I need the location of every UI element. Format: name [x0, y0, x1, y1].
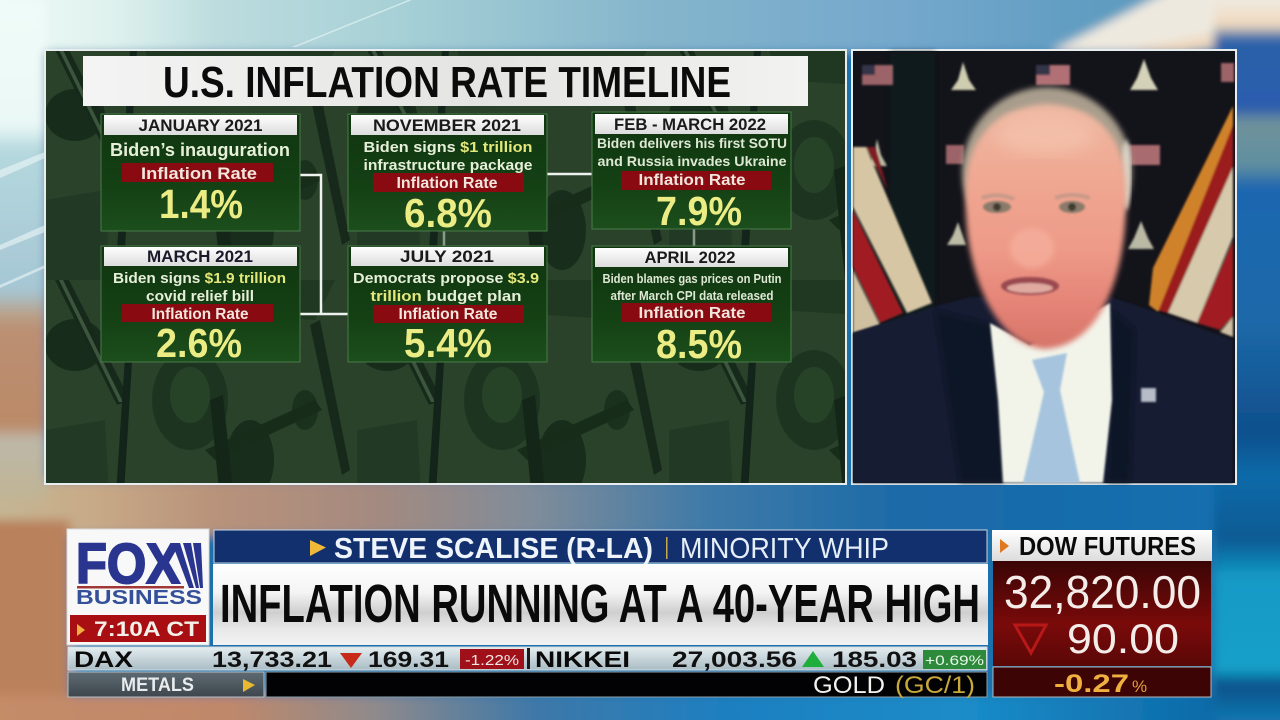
time box: 7:10A CT: [94, 618, 199, 641]
metals row: [68, 672, 987, 699]
metals row: GOLD: [813, 672, 885, 699]
card: July 2021: [348, 246, 547, 366]
shirt collar: [990, 303, 1112, 483]
card: March 2021: covid relief bill: [146, 288, 254, 305]
card: January 2021: JANUARY 2021: [138, 116, 262, 135]
metals row: METALS: [121, 675, 194, 696]
dow futures box: [992, 530, 1212, 698]
backdrop flags and capitol icons: [862, 59, 1234, 249]
lower third: name strap: MINORITY WHIP: [680, 533, 889, 565]
logo text: FOX: [76, 532, 180, 596]
logo text: BUSINESS: [76, 587, 202, 609]
card: April 2022: Inflation Rate: [638, 305, 746, 322]
lower third: logo: [67, 529, 209, 645]
card: March 2021: Inflation Rate: [152, 306, 249, 323]
necktie: [1023, 353, 1080, 483]
right flag: [1149, 106, 1233, 337]
card: July 2021: trillion budget plan: [370, 288, 522, 305]
ticker row: 185.03: [832, 647, 917, 672]
ticker row: [68, 647, 987, 672]
card: July 2021: Inflation Rate: [398, 306, 498, 323]
card: April 2022: after March CPI data released: [610, 288, 774, 303]
card: November 2021: Inflation Rate: [396, 175, 498, 192]
card: Feb - March 2022: Inflation Rate: [638, 172, 746, 189]
card: January 2021: [101, 114, 300, 231]
left flag: [853, 147, 932, 333]
card: Feb - March 2022: Biden delivers his first SOTU: [597, 135, 787, 151]
lower third: name strap: [214, 530, 987, 565]
card: Feb - March 2022: [592, 112, 791, 234]
card: April 2022: Biden blames gas prices on Putin: [602, 271, 782, 286]
panel: inflation timeline: [45, 50, 846, 484]
ticker row: 27,003.56: [672, 647, 797, 672]
card: March 2021: 2.6%: [156, 320, 242, 366]
face: [966, 104, 1126, 349]
title bar: U.S. INFLATION RATE TIMELINE: [163, 58, 731, 107]
ticker row: +0.69%: [925, 652, 984, 668]
dow futures box: 32,820.00: [1004, 566, 1201, 618]
ticker row: NIKKEI: [535, 647, 630, 672]
card: July 2021: JULY 2021: [400, 247, 494, 266]
ticker row: 169.31: [368, 647, 449, 672]
card: Feb - March 2022: FEB - MARCH 2022: [614, 115, 766, 134]
dow futures box: -0.27: [1054, 670, 1129, 698]
card: April 2022: [592, 246, 791, 367]
lower third: headline: INFLATION RUNNING AT A 40-YEAR HIGH: [220, 574, 980, 634]
suit: [853, 297, 1233, 483]
card: November 2021: 6.8%: [404, 190, 492, 236]
card: March 2021: [101, 246, 300, 366]
card: November 2021: NOVEMBER 2021: [373, 116, 521, 135]
card: Feb - March 2022: 7.9%: [656, 188, 742, 234]
ticker row: DAX: [74, 647, 133, 672]
panel: guest video of Steve Scalise: [852, 50, 1236, 484]
lapel pin: [1141, 388, 1156, 402]
hair: [962, 87, 1132, 257]
metals row: (GC/1): [895, 672, 975, 699]
card: July 2021: 5.4%: [404, 320, 492, 366]
lower third: headline: [213, 564, 988, 645]
down triangle: [1015, 625, 1046, 653]
card: November 2021: infrastructure package: [364, 157, 532, 174]
down arrow: [340, 653, 362, 668]
up arrow: [802, 651, 824, 667]
connectors: [300, 174, 694, 314]
ticker row: 13,733.21: [212, 647, 332, 672]
card: March 2021: MARCH 2021: [147, 247, 253, 266]
card: November 2021: Biden signs $1 trillion: [364, 139, 532, 156]
card: January 2021: Biden’s inauguration: [110, 140, 290, 160]
background streaks: [0, 0, 412, 288]
card: November 2021: [348, 114, 547, 236]
dow futures box: DOW FUTURES: [1019, 531, 1196, 561]
eyes and mouth: [982, 195, 1090, 295]
card: April 2022: APRIL 2022: [644, 248, 736, 267]
dow futures box: %: [1132, 677, 1147, 696]
card: January 2021: 1.4%: [159, 181, 243, 227]
card: Feb - March 2022: and Russia invades Ukraine: [598, 153, 787, 169]
lower third: name strap: STEVE SCALISE (R-LA): [334, 533, 653, 565]
dow futures box: 90.00: [1067, 615, 1179, 662]
time box: [70, 615, 206, 642]
ticker row: -1.22%: [465, 652, 519, 669]
card: April 2022: 8.5%: [656, 321, 742, 367]
card: January 2021: Inflation Rate: [141, 164, 257, 183]
card: July 2021: Democrats propose $3.9: [353, 270, 539, 287]
card: March 2021: Biden signs $1.9 trillion: [113, 270, 286, 287]
